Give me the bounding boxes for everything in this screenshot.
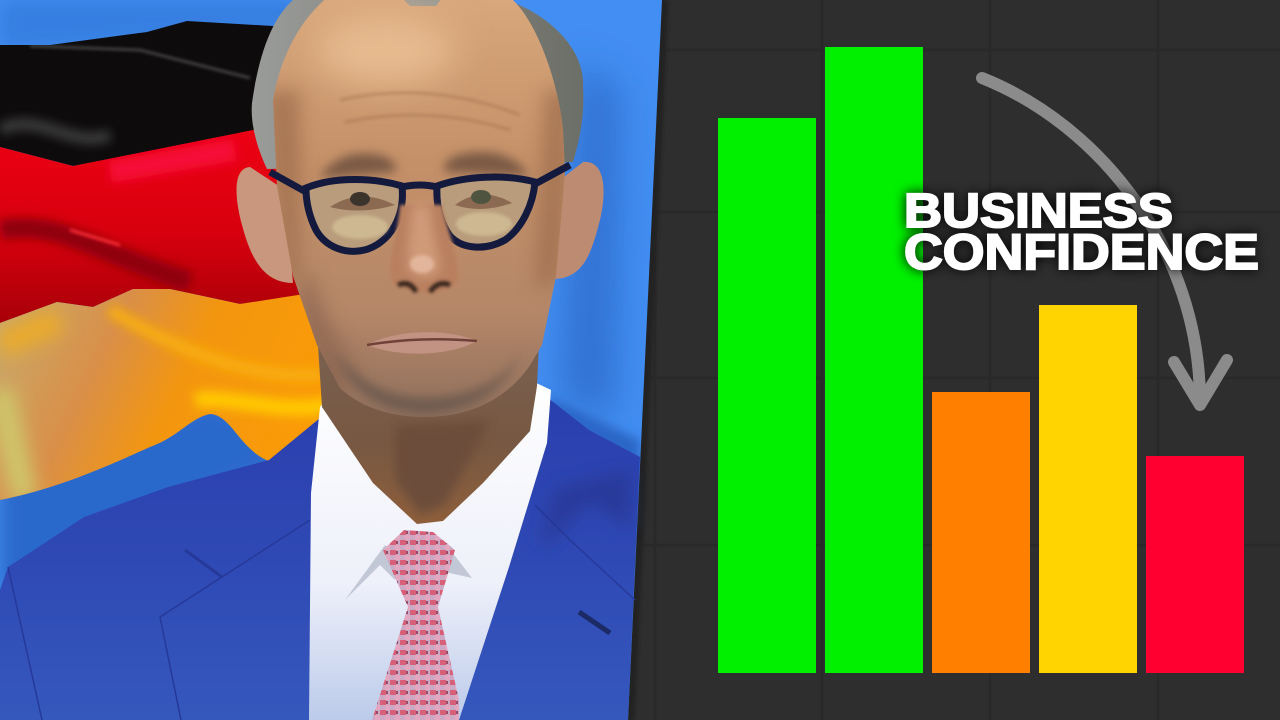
left ear [237, 167, 293, 283]
right temple shading [532, 84, 565, 287]
jacket lapel details [8, 505, 635, 720]
nose [390, 205, 459, 292]
glasses [270, 165, 570, 251]
right brow shadow [444, 152, 528, 176]
eyelids [330, 194, 512, 211]
eyes [350, 192, 370, 206]
panel: blue portrait background [0, 0, 670, 720]
brow shadows [320, 154, 396, 178]
right lens [437, 177, 535, 247]
jaw shadow [339, 359, 515, 417]
face shading [262, 16, 575, 414]
bar 4 [1039, 305, 1137, 673]
bar chart [718, 47, 1244, 673]
right collar shadow [445, 552, 472, 578]
arrow: downward trend [982, 78, 1227, 405]
right jacket shadow [540, 470, 630, 550]
mouth [367, 332, 477, 354]
face [273, 0, 565, 417]
title: business confidence: BUSINESS [904, 185, 1173, 238]
title: business confidence: CONFIDENCE [904, 224, 1259, 280]
bridge and temples [270, 165, 570, 192]
forehead highlight [315, 16, 455, 84]
white shirt [309, 380, 551, 720]
icon: German flag [0, 21, 345, 500]
cheek shadow [296, 276, 350, 387]
title: business confidence [904, 185, 1259, 280]
hair [252, 0, 583, 169]
forehead wrinkles [340, 93, 520, 130]
illustration: man in suit [0, 0, 640, 720]
bar 2 [825, 47, 923, 673]
left lens [306, 180, 402, 251]
right ear [553, 162, 604, 279]
flag gold stripe [0, 289, 345, 500]
flag black stripe [0, 21, 290, 166]
temple shading [262, 90, 300, 280]
under-eye pouches [332, 215, 388, 239]
bar 1 [718, 118, 816, 673]
title: business confidence: BUSINESS [904, 185, 1173, 238]
bar 3 [932, 392, 1030, 673]
pink tie [372, 530, 459, 720]
neck [317, 320, 540, 524]
suit jacket [0, 398, 640, 720]
flag red stripe [0, 120, 310, 323]
title: business confidence: CONFIDENCE [904, 224, 1259, 280]
crown hair tuft [402, 0, 442, 6]
neck centre shadow [395, 420, 490, 515]
bar 5 [1146, 456, 1244, 673]
collar shadow [345, 545, 405, 600]
